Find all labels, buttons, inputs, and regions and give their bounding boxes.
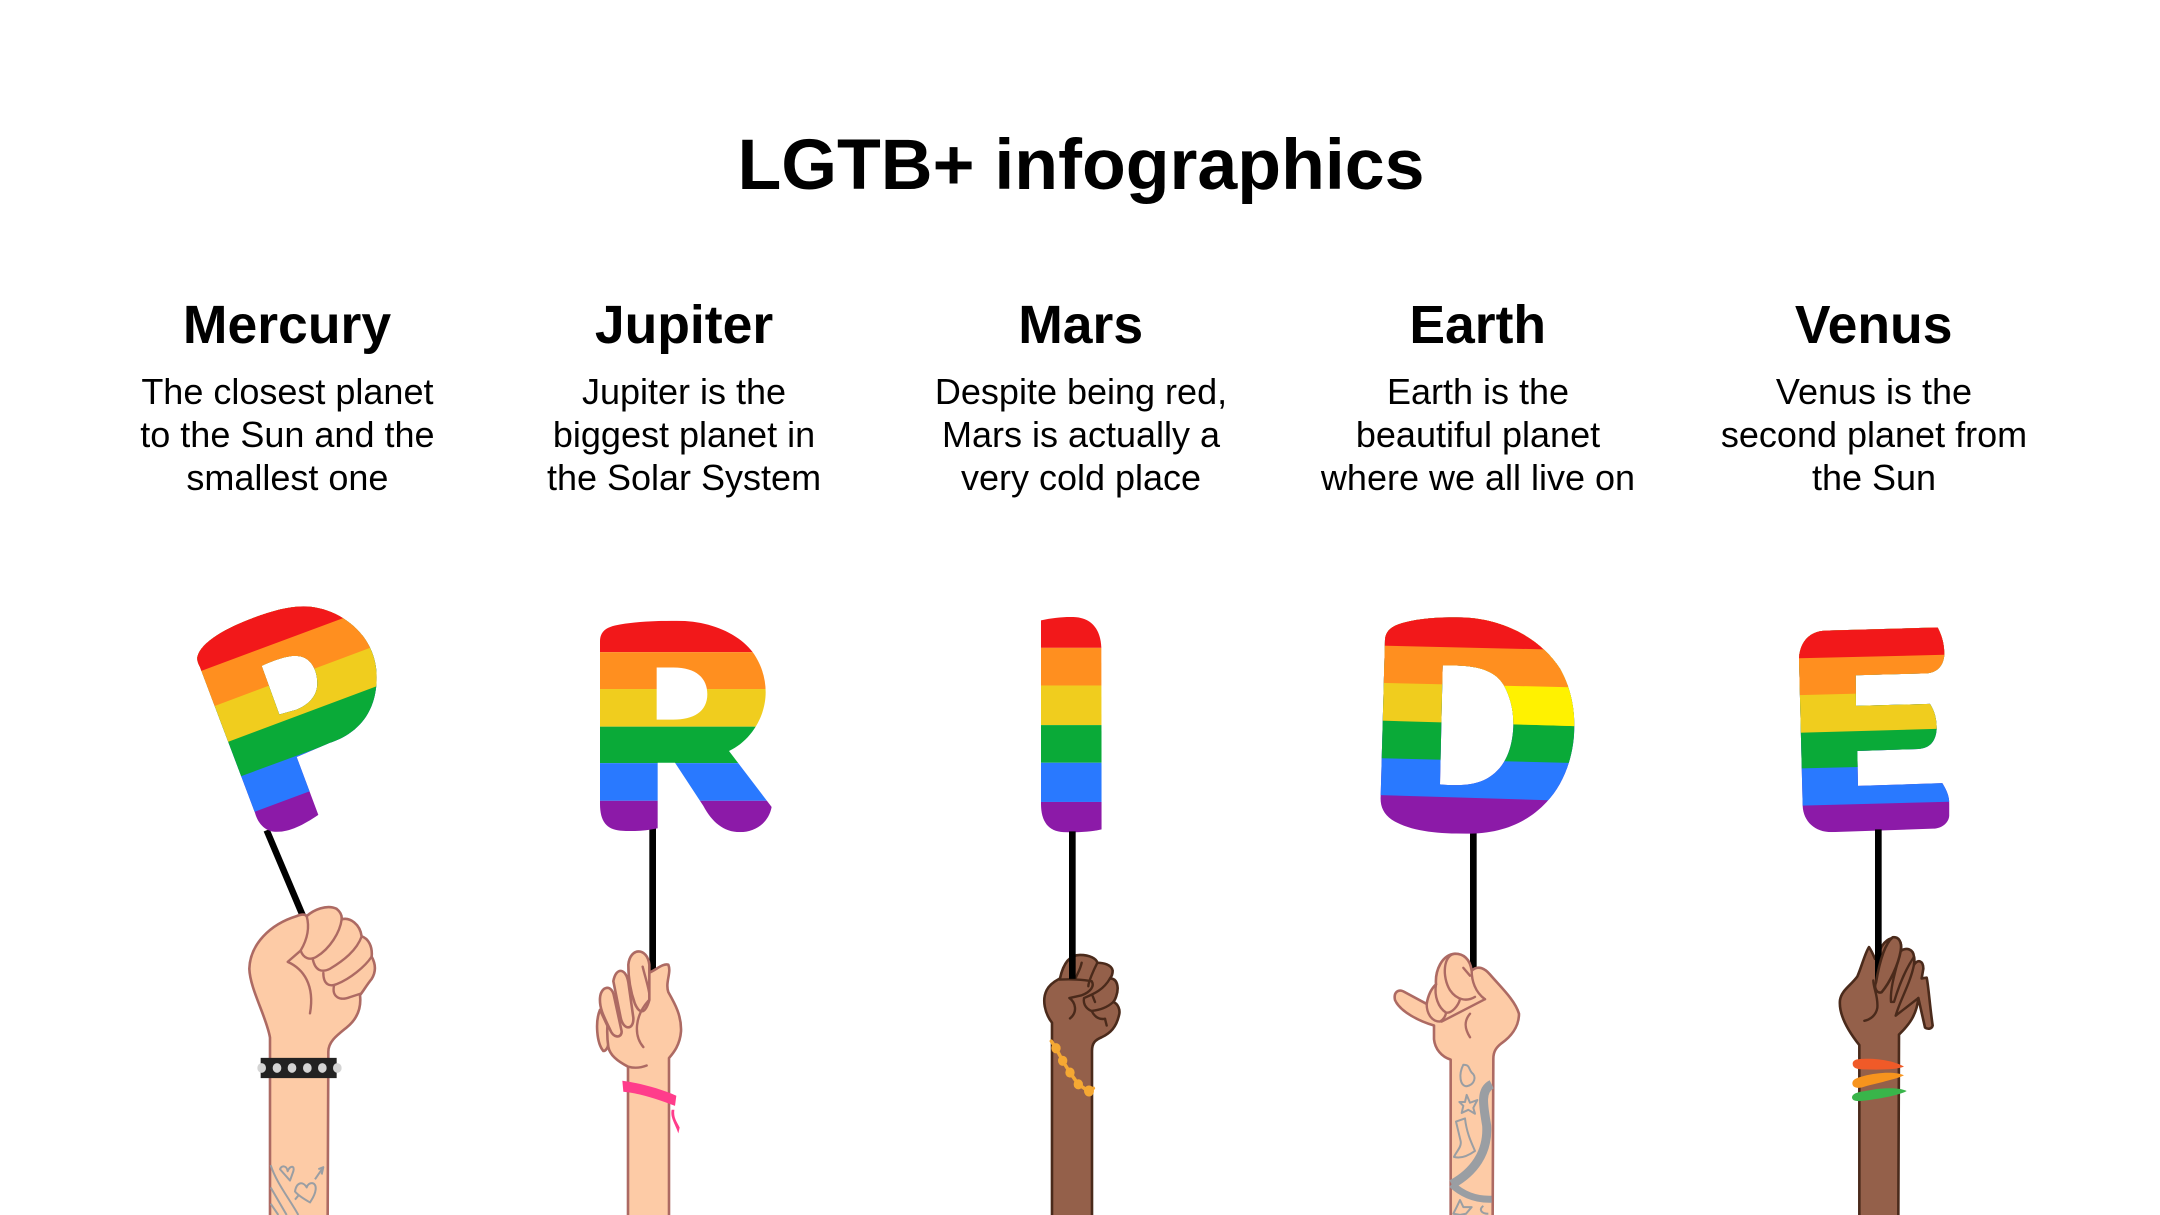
text block: Mars description: Despite being red, — [935, 371, 1227, 412]
text block: Mars description: very cold place — [961, 457, 1201, 498]
text block: Jupiter description: Jupiter is the — [582, 371, 786, 412]
letter P rainbow — [197, 606, 377, 832]
letter E rainbow — [1799, 628, 1950, 832]
stick — [267, 830, 303, 917]
pink wristband — [622, 1081, 680, 1133]
panel: Earth — [1320, 296, 1635, 1215]
text block: Jupiter description: the Solar System — [547, 457, 821, 498]
letter R rainbow — [593, 616, 777, 836]
stick — [649, 827, 656, 976]
panel: Jupiter — [547, 296, 821, 1215]
text block: Mercury description: The closest planet — [141, 371, 433, 412]
letter I rainbow — [1041, 617, 1102, 832]
text block: Venus description: second planet from — [1721, 414, 2027, 455]
text block: Mars description — [935, 371, 1227, 498]
text block: Venus description — [1721, 371, 2027, 498]
tattoos — [1452, 1065, 1492, 1215]
text block: Mercury description — [140, 371, 435, 498]
text block: Mercury description: smallest one — [186, 457, 388, 498]
tattoos — [271, 1165, 323, 1215]
gold bead bracelet — [1051, 1041, 1094, 1096]
text block: Venus description: the Sun — [1812, 457, 1936, 498]
illustration: hand holding letter P — [197, 606, 377, 1215]
text block: Earth description: Earth is the — [1387, 371, 1569, 412]
heading: Mars: Mars — [1018, 296, 1143, 355]
front finger — [1875, 937, 1901, 993]
panel: Mercury — [140, 296, 435, 1215]
hand: light skin side grip — [597, 951, 681, 1215]
wristband with studs — [257, 1058, 342, 1078]
hand: light skin thumb out — [1395, 954, 1519, 1215]
illustration: hand holding letter I — [1037, 612, 1119, 1215]
letter D rainbow — [1380, 617, 1574, 834]
text block: Mars description: Mars is actually a — [942, 414, 1221, 455]
heading: Jupiter: Jupiter — [595, 296, 773, 355]
illustration: hand holding letter E — [1799, 628, 1950, 1215]
heading: Earth: Earth — [1409, 296, 1546, 355]
panel: Venus — [1721, 296, 2027, 1215]
text block: Mercury description: to the Sun and the — [140, 414, 435, 455]
text block: Earth description: beautiful planet — [1356, 414, 1600, 455]
stick — [1470, 831, 1477, 975]
text block: Earth description — [1320, 371, 1635, 498]
illustration: hand holding letter D — [1373, 600, 1580, 1215]
heading: Venus: Venus — [1795, 296, 1953, 355]
title: LGTB+ infographics — [737, 125, 1425, 205]
text block: Venus description: Venus is the — [1776, 371, 1972, 412]
hand: dark skin open grip — [1840, 938, 1933, 1215]
heading: Mercury: Mercury — [183, 296, 391, 355]
text block: Earth description: where we all live on — [1320, 457, 1635, 498]
stick — [1875, 829, 1882, 980]
stick — [1069, 831, 1076, 979]
hand: light skin fist — [249, 907, 375, 1215]
panel: Mars — [935, 296, 1227, 1215]
hand: dark skin fist — [1044, 955, 1119, 1215]
illustration: hand holding letter R — [593, 616, 777, 1215]
text block: Jupiter description: biggest planet in — [553, 414, 815, 455]
bangles — [1852, 1059, 1907, 1101]
text block: Jupiter description — [547, 371, 821, 498]
